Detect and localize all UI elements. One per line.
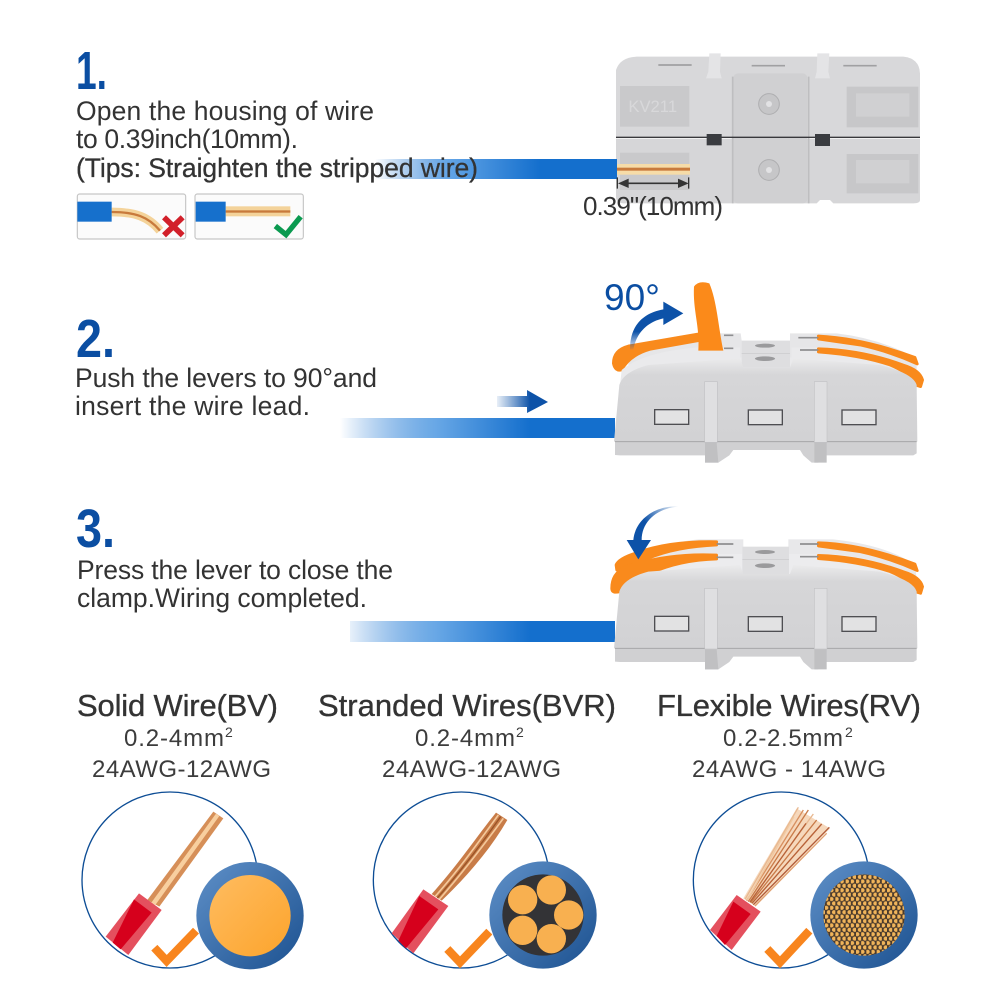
heading: step 1: 1. — [76, 41, 107, 101]
specs: flexible wires: 24AWG - 14AWG — [692, 756, 886, 783]
specs: flexible wires: 2 — [845, 724, 853, 740]
connector: top view: KV211 — [628, 97, 677, 116]
label: 90 degrees: 90° — [604, 277, 660, 318]
heading: flexible wires: FLexible Wires(RV) — [657, 688, 921, 723]
text: step 1 instructions: Open the housing of wire — [76, 96, 374, 126]
text: step 1 instructions — [76, 96, 478, 183]
specs: solid wire: 2 — [225, 724, 233, 740]
text: step 3 instructions — [77, 555, 393, 613]
dimension arrow — [617, 177, 689, 189]
text: step 3 instructions: clamp.Wiring completed. — [77, 583, 367, 613]
text: step 3 instructions: Press the lever to close the — [77, 555, 393, 585]
heading: step 3: 3. — [76, 499, 115, 559]
specs: solid wire — [92, 724, 271, 783]
text: step 1 instructions: (Tips: Straighten the stripped wire) — [76, 153, 478, 183]
text: step 2 instructions — [75, 363, 377, 421]
heading: step 2: 2. — [76, 309, 115, 369]
icon: flexible wire — [693, 792, 918, 969]
specs: flexible wires: 0.2-2.5mm — [723, 725, 843, 752]
heading: solid wire: Solid Wire(BV) — [77, 688, 278, 723]
icon: straight wire correct — [195, 194, 303, 239]
arrow: insert direction — [497, 390, 548, 413]
text: step 1 instructions: to 0.39inch(10mm). — [76, 124, 298, 154]
wire: step 1 — [375, 159, 616, 179]
specs: stranded wires: 24AWG-12AWG — [382, 756, 561, 783]
specs: stranded wires — [382, 724, 561, 783]
icon: bent wire wrong — [77, 194, 186, 239]
arrow: lever up — [630, 302, 683, 349]
icon: stranded wire — [373, 792, 597, 969]
connector: top view — [616, 53, 920, 203]
arrow: lever down — [627, 507, 678, 559]
wire: step 3 — [350, 621, 615, 642]
specs: solid wire: 24AWG-12AWG — [92, 756, 271, 783]
wire: step 1 end — [600, 159, 617, 179]
specs: stranded wires: 0.2-4mm — [415, 725, 515, 752]
label: dimension: 0.39"(10mm) — [583, 191, 723, 221]
specs: stranded wires: 2 — [516, 724, 524, 740]
wire: step 2 — [340, 418, 615, 438]
specs: flexible wires — [692, 724, 886, 783]
icon: solid wire — [82, 792, 304, 969]
text: step 2 instructions: Push the levers to 90°and — [75, 363, 377, 393]
text: step 2 instructions: insert the wire lead. — [75, 391, 310, 421]
connector: lever open — [613, 282, 923, 463]
heading: stranded wires: Stranded Wires(BVR) — [318, 688, 616, 723]
connector: lever closed — [612, 539, 923, 669]
specs: solid wire: 0.2-4mm — [124, 725, 224, 752]
